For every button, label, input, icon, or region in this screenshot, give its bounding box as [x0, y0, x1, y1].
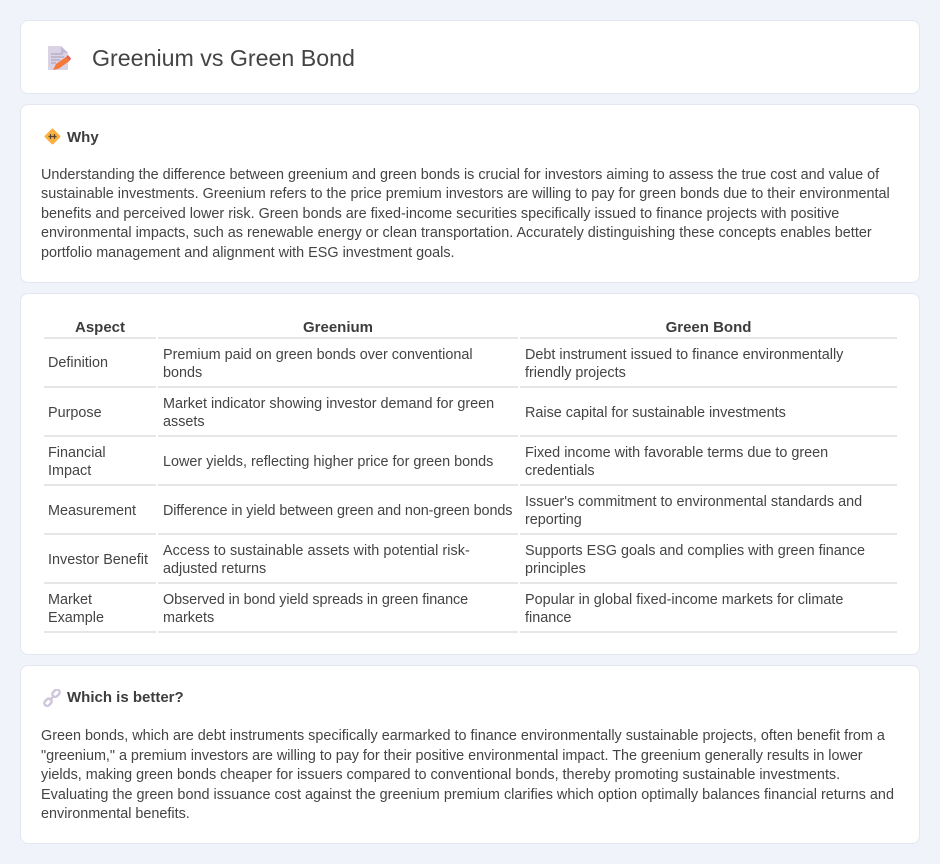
- row: purpose: Raise capital for sustainable investments: [525, 405, 786, 421]
- icon: warning diamond: [44, 128, 60, 144]
- icon: link: [43, 689, 61, 707]
- table header: aspect: [44, 317, 156, 339]
- row: financial impact: Impact: [48, 463, 91, 479]
- text block: why: benefits and perceived lower risk. Green bonds are fixed-income securities specifically issued to finance projects with positive: [41, 206, 839, 222]
- text block: which is better: yields, making green bonds cheaper for issuers compared to conventional bonds, thereby promoting sustainable investments.: [41, 767, 840, 783]
- heading: which is better: Which is better?: [67, 689, 184, 706]
- row: investor benefit: principles: [525, 561, 586, 577]
- panel: comparison table: [20, 293, 920, 655]
- table header: greenium: Greenium: [303, 319, 373, 336]
- row: purpose: Purpose: [48, 405, 102, 421]
- panel: which is better: [20, 665, 920, 844]
- row: definition: bonds: [163, 365, 202, 381]
- row: measurement: Measurement: [48, 503, 136, 519]
- text block: why: environmental impacts, such as renewable energy or clean transportation. Accurately distinguishing these concepts enables better: [41, 225, 872, 241]
- row: investor benefit: Access to sustainable assets with potential risk-: [163, 543, 470, 559]
- heading: why: Why: [67, 129, 99, 146]
- row: definition: Definition: [48, 355, 108, 371]
- row: definition: friendly projects: [525, 365, 626, 381]
- icon: memo with pencil: [48, 46, 71, 70]
- table header: green bond: Green Bond: [666, 319, 751, 336]
- text block: which is better: [41, 728, 894, 822]
- panel: title card: [20, 20, 920, 94]
- text block: why: portfolio management and alignment with ESG investment goals.: [41, 245, 455, 261]
- text block: why: sustainable investments. Greenium refers to the price premium investors are willing to pay for green bonds due to their environmental: [41, 186, 890, 202]
- row: market example: finance: [525, 610, 571, 626]
- row: investor benefit: adjusted returns: [163, 561, 266, 577]
- table header: greenium: [158, 317, 518, 339]
- row: measurement: Issuer's commitment to environmental standards and: [525, 494, 862, 510]
- row: investor benefit: Supports ESG goals and complies with green finance: [525, 543, 865, 559]
- row: market example: [44, 592, 897, 633]
- row: measurement: Difference in yield between green and non-green bonds: [163, 503, 512, 519]
- row: measurement: reporting: [525, 512, 582, 528]
- row: financial impact: Lower yields, reflecting higher price for green bonds: [163, 454, 493, 470]
- row: financial impact: [44, 445, 897, 486]
- row: measurement: [44, 494, 897, 535]
- row: purpose: assets: [163, 414, 205, 430]
- row: definition: Debt instrument issued to finance environmentally: [525, 347, 843, 363]
- row: market example: Example: [48, 610, 104, 626]
- row: financial impact: credentials: [525, 463, 595, 479]
- row: market example: markets: [163, 610, 214, 626]
- row: purpose: Market indicator showing investor demand for green: [163, 396, 494, 412]
- row: investor benefit: Investor Benefit: [48, 552, 148, 568]
- panel: why: [20, 104, 920, 283]
- row: purpose: [44, 396, 897, 437]
- row: market example: Market: [48, 592, 92, 608]
- text block: which is better: "greenium," a premium investors are willing to pay for their positive environmental impact. The greenium generally results in lower: [41, 748, 863, 764]
- text block: which is better: environmental benefits.: [41, 806, 190, 822]
- row: market example: Popular in global fixed-income markets for climate: [525, 592, 843, 608]
- row: definition: [44, 347, 897, 388]
- row: financial impact: Financial: [48, 445, 106, 461]
- title: Greenium vs Green Bond: [92, 45, 355, 71]
- table header: aspect: Aspect: [75, 319, 125, 336]
- row: financial impact: Fixed income with favorable terms due to green: [525, 445, 828, 461]
- text block: which is better: Green bonds, which are debt instruments specifically earmarked to finance environmentally sustainable projects, often benefit from a: [41, 728, 885, 744]
- text block: which is better: Evaluating the green bond issuance cost against the greenium premium clarifies which option optimally balances financial returns and: [41, 787, 894, 803]
- text block: why: [41, 167, 890, 261]
- row: definition: Premium paid on green bonds over conventional: [163, 347, 473, 363]
- row: investor benefit: [44, 543, 897, 584]
- text block: why: Understanding the difference between greenium and green bonds is crucial for investors aiming to assess the true cost and value of: [41, 167, 879, 183]
- table header: green bond: [520, 317, 897, 339]
- row: market example: Observed in bond yield spreads in green finance: [163, 592, 468, 608]
